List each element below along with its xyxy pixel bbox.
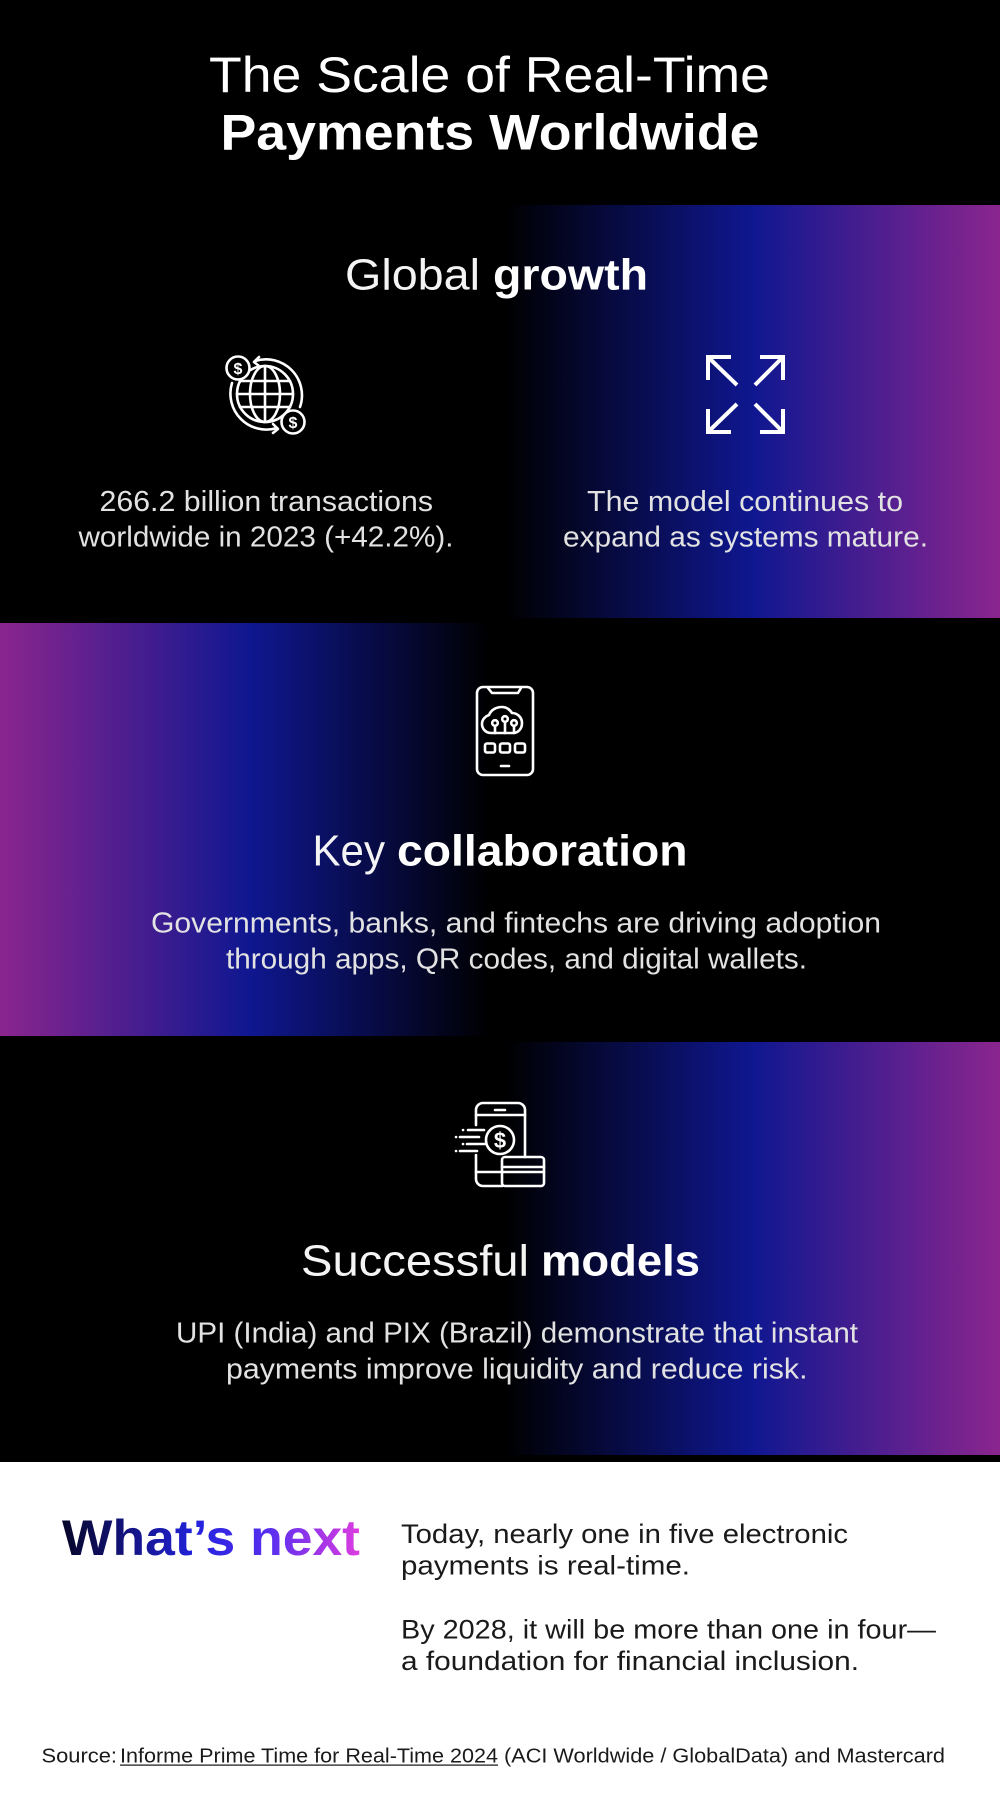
text: collaboration body: [151, 908, 881, 976]
heading: key collaboration: Key: [312, 827, 385, 876]
text: model expands: [563, 486, 928, 554]
text: today and 2028: [401, 1519, 936, 1676]
panel: what's next: [0, 1462, 1000, 1800]
heading: global growth: [345, 250, 648, 300]
text: model expands: expand as systems mature.: [563, 522, 928, 554]
text: today and 2028: By 2028, it will be more than one in four—: [401, 1614, 936, 1644]
title: Payments Worldwide: [220, 104, 760, 160]
heading: successful models: [301, 1237, 700, 1286]
text: model expands: The model continues to: [587, 486, 903, 518]
heading: global growth: growth: [493, 250, 648, 300]
text: transactions: [77, 486, 453, 554]
text: today and 2028: payments is real-time.: [401, 1550, 690, 1580]
source line: Informe Prime Time for Real-Time 2024: [120, 1746, 498, 1768]
icon: phone with cloud: [477, 687, 533, 775]
source line: Source:: [42, 1746, 117, 1768]
heading: successful models: Successful: [301, 1237, 529, 1286]
title: The Scale of Real-Time: [209, 47, 770, 103]
text: transactions: worldwide in 2023 (+42.2%).: [77, 522, 453, 554]
heading: global growth: Global: [345, 250, 480, 300]
source line: (ACI Worldwide / GlobalData) and Mastercard: [504, 1746, 945, 1768]
text: collaboration body: Governments, banks, and fintechs are driving adoption: [151, 908, 881, 940]
text: models body: [176, 1318, 858, 1386]
panel: key collaboration: [0, 623, 1000, 1036]
icon: globe with dollar coins: $: [234, 361, 243, 378]
text: models body: UPI (India) and PIX (Brazil) demonstrate that instant: [176, 1318, 858, 1350]
heading: successful models: models: [541, 1237, 700, 1286]
text: transactions: 266.2 billion transactions: [100, 486, 433, 518]
icon: globe with dollar coins: [226, 356, 304, 434]
text: today and 2028: Today, nearly one in five electronic: [401, 1519, 848, 1549]
text: collaboration body: through apps, QR codes, and digital wallets.: [226, 944, 807, 976]
text: today and 2028: a foundation for financial inclusion.: [401, 1646, 859, 1676]
icon: globe with dollar coins: $: [289, 415, 298, 432]
source line: [42, 1746, 945, 1768]
heading: key collaboration: collaboration: [397, 827, 688, 876]
text: models body: payments improve liquidity and reduce risk.: [226, 1354, 808, 1386]
icon: expand arrows: [708, 357, 783, 432]
panel: successful models: [0, 1042, 1000, 1455]
icon: phone payment with card: [456, 1103, 544, 1186]
icon: phone payment with card: $: [494, 1128, 506, 1153]
title: [209, 47, 770, 160]
heading: what's next: What’s next: [62, 1510, 360, 1566]
panel: global growth: [0, 205, 1000, 618]
